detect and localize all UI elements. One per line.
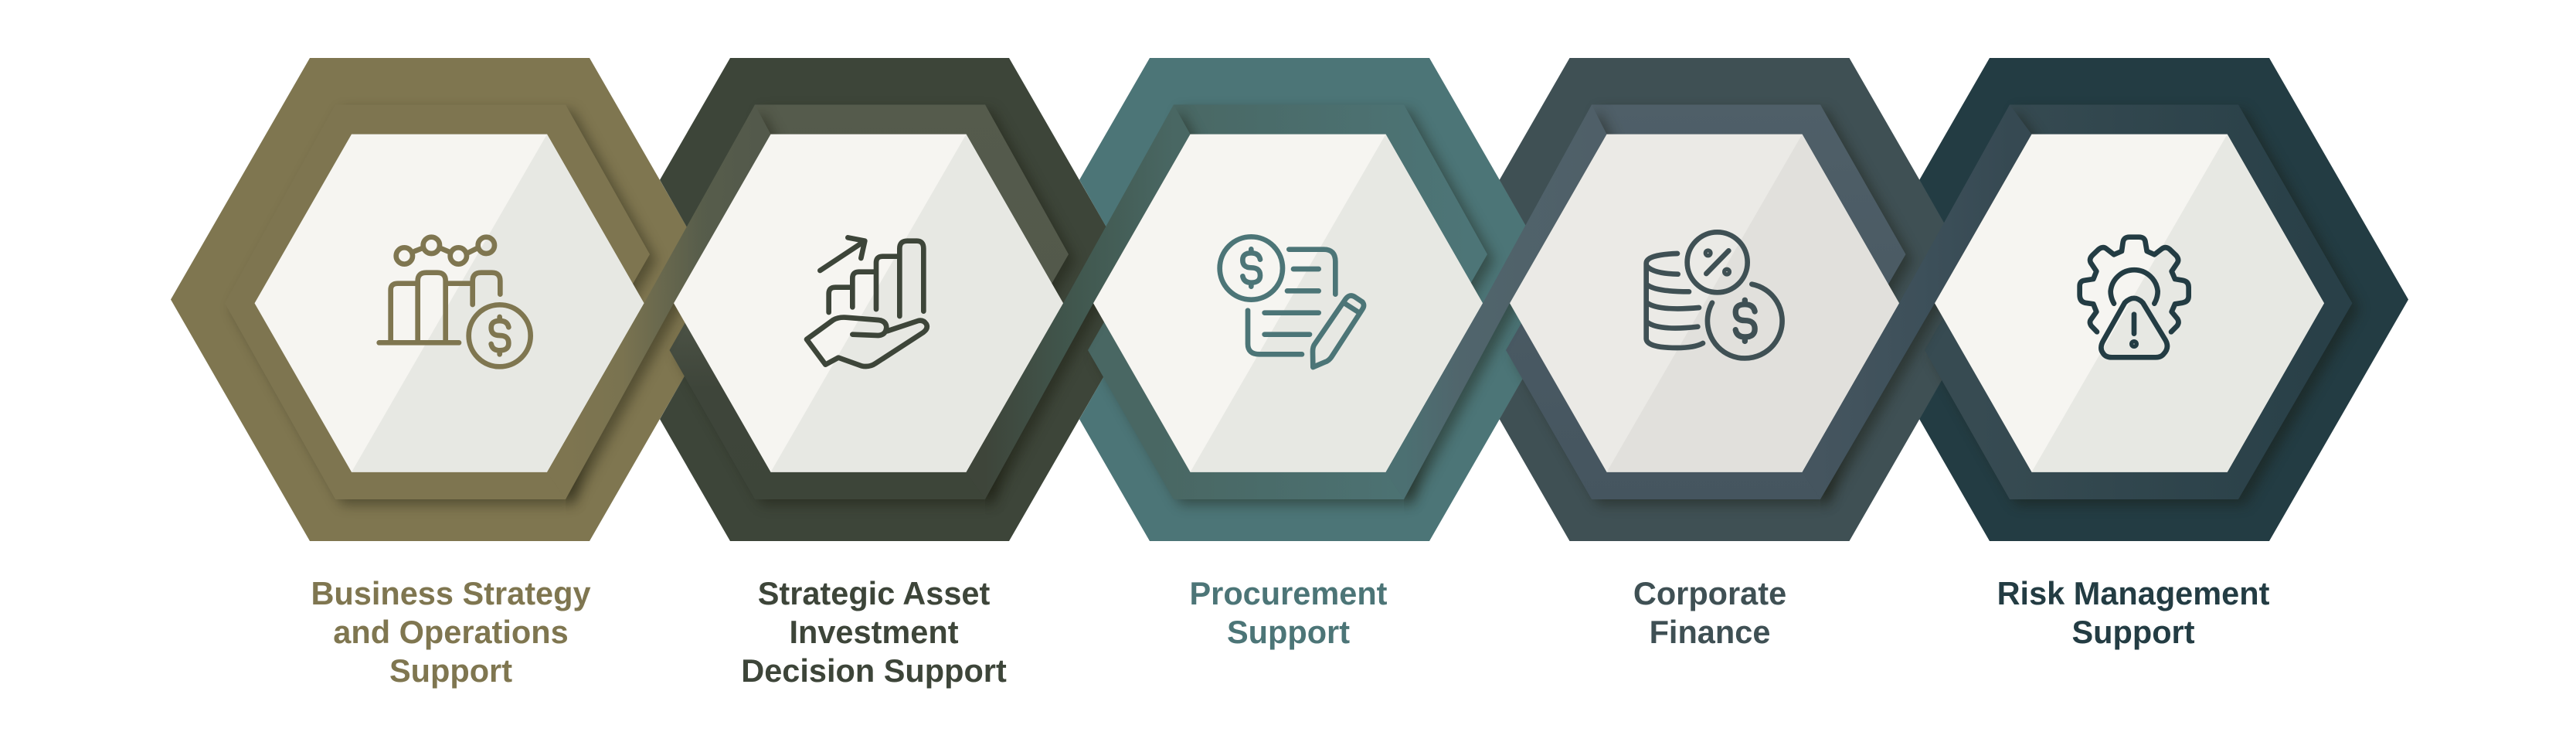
inner hexagon shaded half [1190,134,1483,472]
inner hexagon [1510,134,1899,472]
outer hexagon [1500,58,1989,541]
label: Corporate [1633,575,1786,611]
label: Support [389,652,512,689]
label: Support [1227,614,1350,650]
outer hexagon [660,58,1148,541]
outer hexagon [1079,58,1568,541]
label: and Operations [333,614,569,650]
inner hexagon [1935,134,2324,472]
middle hexagon layer [225,104,650,499]
ribbon link from previous hexagon [1386,104,1607,499]
label: Business Strategy [311,575,591,611]
inner hexagon shaded half [771,134,1063,472]
icon: invoice with dollar coin and pencil [1220,237,1364,367]
label: Decision Support [741,652,1007,689]
inner hexagon shaded half [2032,134,2324,472]
inner hexagon [255,134,644,472]
icon: coin stack with percent and dollar coins [1647,232,1782,358]
middle hexagon layer [1925,104,2352,499]
ribbon link from previous hexagon [966,104,1190,499]
inner hexagon [674,134,1063,472]
panel: Strategic Asset Investment Decision Support [547,58,1148,689]
middle hexagon layer [1506,104,1905,499]
icon: gear with warning triangle [2080,237,2189,357]
panel: Procurement Support [966,58,1568,650]
middle hexagon layer [1088,104,1487,499]
label: Investment [789,614,959,650]
panel: Risk Management Support [1802,58,2408,650]
middle hexagon layer [669,104,1069,499]
inner hexagon shaded half [352,134,644,472]
ribbon link from previous hexagon [1802,104,2032,499]
icon: growth bars on an open hand [807,237,927,366]
ribbon link from previous hexagon [547,104,771,499]
inner hexagon shaded half [1607,134,1899,472]
outer hexagon [1919,58,2408,541]
label: Risk Management [1997,575,2270,611]
label: Strategic Asset [758,575,990,611]
label: Procurement [1190,575,1388,611]
icon: bar chart with trend line and dollar coin [379,237,531,366]
label: Finance [1650,614,1770,650]
label: Support [2071,614,2195,650]
outer hexagon [171,58,729,541]
panel: Corporate Finance [1386,58,1989,650]
inner hexagon [1093,134,1483,472]
panel: Business Strategy and Operations Support [171,58,729,689]
